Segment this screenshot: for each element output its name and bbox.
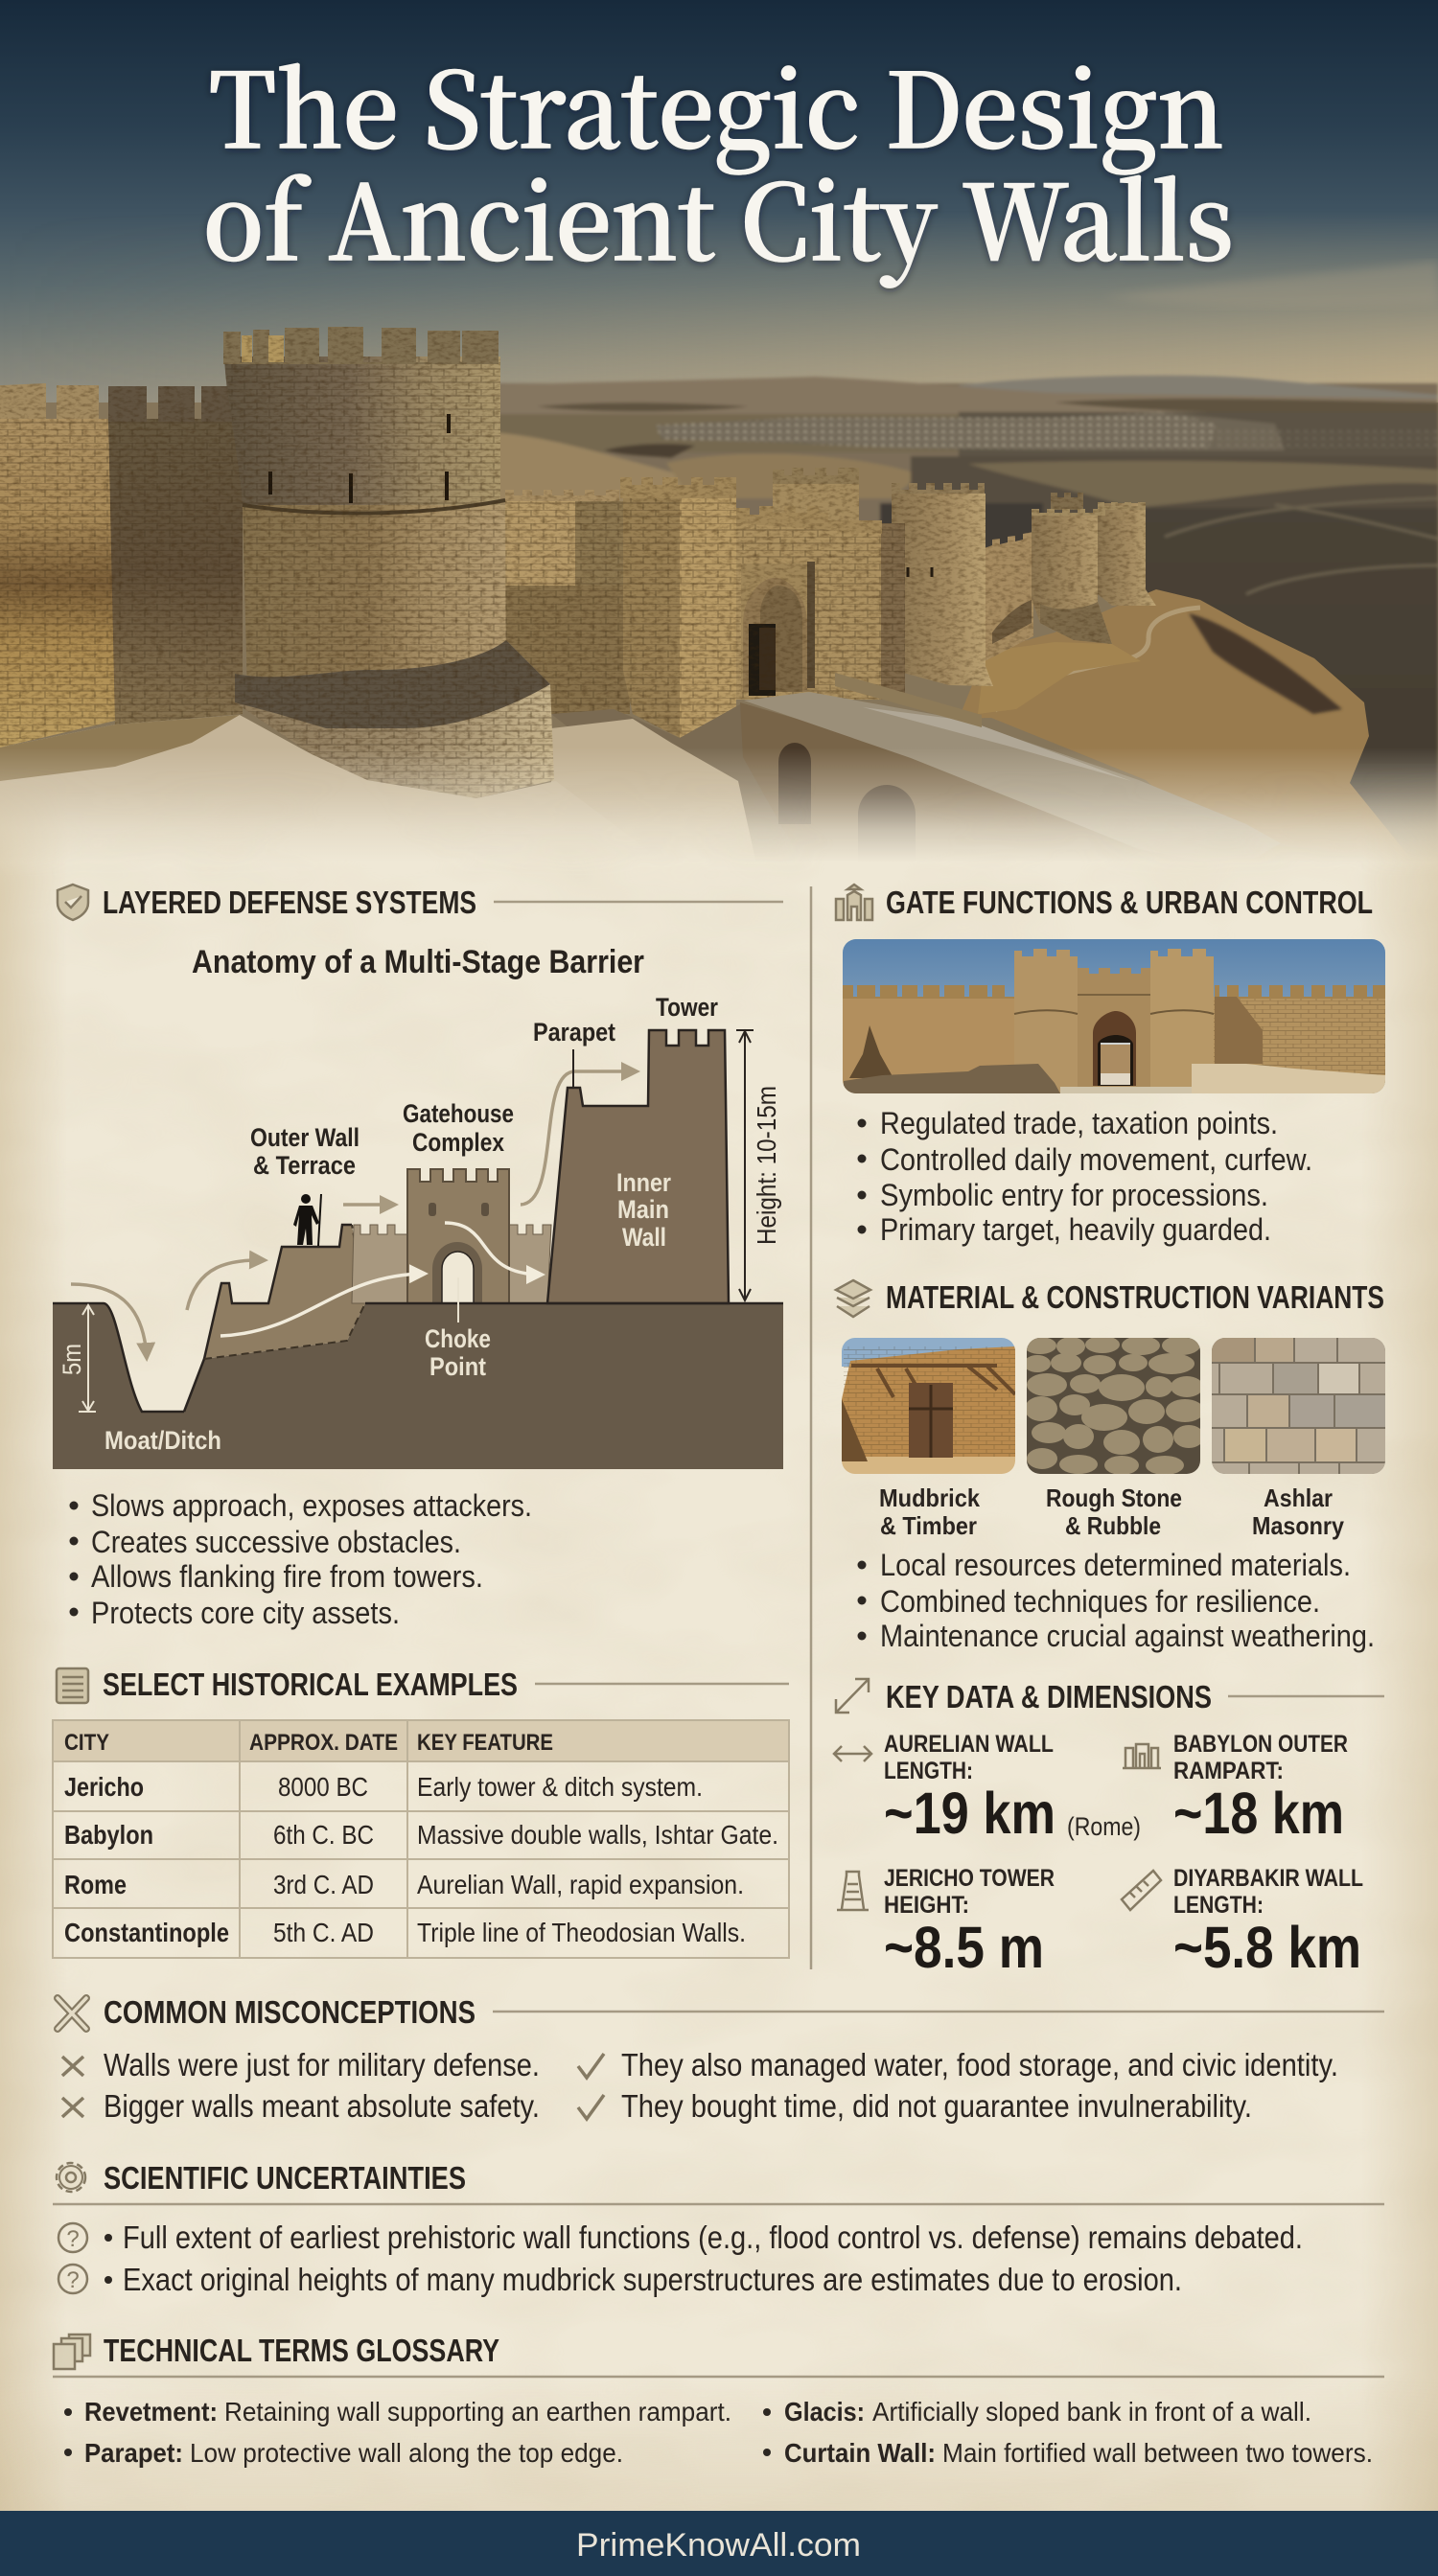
icon: gear xyxy=(57,2163,85,2192)
glossary terms: Revetment: xyxy=(84,2397,218,2426)
glossary terms: Main fortified wall between two towers. xyxy=(942,2438,1373,2468)
curtain wall right xyxy=(509,1225,551,1303)
captions: Mudbrick xyxy=(879,1484,980,1512)
heading: LAYERED DEFENSE SYSTEMS xyxy=(103,885,476,920)
arrow: path through terrace xyxy=(220,1274,425,1336)
icon: notepad xyxy=(57,1668,88,1703)
labels xyxy=(104,993,718,1455)
bullet list: Creates successive obstacles. xyxy=(91,1525,461,1559)
glossary terms: Curtain Wall: xyxy=(784,2438,936,2468)
panel: key data and dimensions xyxy=(834,1679,1384,1980)
icon: shield xyxy=(58,885,88,920)
title: of Ancient City Walls xyxy=(203,141,1234,289)
panel: scientific uncertainties xyxy=(53,2160,1384,2297)
curtain wall left xyxy=(352,1225,407,1303)
stat: Diyarbakir wall: ~5.8 km xyxy=(1173,1915,1361,1980)
panel: layered defense systems xyxy=(53,885,783,1630)
arrow: toward gatehouse xyxy=(343,1203,395,1207)
inner main wall and tower xyxy=(547,1030,729,1303)
heading: SELECT HISTORICAL EXAMPLES xyxy=(103,1667,518,1702)
dimension: 5m: 5m xyxy=(58,1344,86,1375)
table rows: Constantinople xyxy=(64,1918,229,1947)
table rows: 8000 BC xyxy=(278,1772,368,1802)
labels: Gatehouse xyxy=(403,1099,514,1128)
panel: technical terms glossary xyxy=(53,2333,1384,2468)
labels: & Terrace xyxy=(253,1151,356,1180)
uncertainty list: Full extent of earliest prehistoric wall functions (e.g., flood control vs. defense) remains debated. xyxy=(123,2220,1303,2255)
bullet list: Slows approach, exposes attackers. xyxy=(91,1488,532,1523)
table rows: Babylon xyxy=(64,1820,153,1850)
bullet list: Controlled daily movement, curfew. xyxy=(880,1142,1312,1177)
callout line xyxy=(457,1277,459,1322)
misconception list xyxy=(62,2047,540,2124)
bullet list xyxy=(69,1488,532,1630)
footer: PrimeKnowAll.com xyxy=(576,2527,861,2564)
bullet list: Symbolic entry for processions. xyxy=(880,1178,1268,1212)
icon: diagonal arrows xyxy=(836,1679,869,1713)
table header: CITY xyxy=(64,1730,109,1756)
heading: COMMON MISCONCEPTIONS xyxy=(104,1994,475,2030)
glossary terms: Artificially sloped bank in front of a wall. xyxy=(872,2397,1311,2426)
table rows: Rome xyxy=(64,1870,127,1899)
terrace xyxy=(204,1225,365,1359)
labels: Main xyxy=(617,1195,669,1224)
labels: Parapet xyxy=(533,1018,615,1046)
tower base xyxy=(235,640,554,798)
photo: rough stone xyxy=(1024,1336,1204,1475)
glossary terms: Retaining wall supporting an earthen rampart. xyxy=(224,2397,731,2426)
stat: Babylon rampart: ~18 km xyxy=(1173,1781,1344,1846)
bullet list: Regulated trade, taxation points. xyxy=(880,1106,1278,1140)
stat: Jericho tower xyxy=(837,1865,1055,1980)
stat: Aurelian wall: (Rome) xyxy=(1067,1812,1141,1841)
photo: mudbrick xyxy=(842,1338,1016,1474)
stat: Aurelian wall xyxy=(834,1731,1141,1846)
land base xyxy=(0,402,1438,862)
arrow: climb to terrace xyxy=(187,1260,265,1310)
stat: Diyarbakir wall: LENGTH: xyxy=(1173,1892,1264,1919)
labels: Outer Wall xyxy=(250,1123,360,1152)
labels: Complex xyxy=(412,1128,504,1157)
icon: layers xyxy=(836,1280,870,1317)
panel: gate functions and urban control xyxy=(836,885,1390,1247)
photo: ashlar xyxy=(1212,1338,1385,1474)
bullet list: Primary target, heavily guarded. xyxy=(880,1212,1271,1247)
panel: material and construction variants xyxy=(836,1279,1385,1653)
dimension: height: Height: 10-15m xyxy=(752,1086,781,1245)
uncertainty list xyxy=(58,2220,1303,2297)
glossary terms: Low protective wall along the top edge. xyxy=(190,2438,623,2468)
hero illustration: fortress above landscape xyxy=(0,0,1438,868)
labels: Wall xyxy=(622,1223,666,1252)
correction list: They also managed water, food storage, and civic identity. xyxy=(621,2047,1338,2082)
stat: Babylon rampart xyxy=(1123,1731,1348,1846)
panel: select historical examples xyxy=(53,1667,789,1958)
stat: Jericho tower: HEIGHT: xyxy=(884,1892,969,1919)
labels: Choke xyxy=(425,1324,491,1353)
soldier xyxy=(293,1194,321,1246)
stat: Babylon rampart: BABYLON OUTER xyxy=(1173,1731,1348,1758)
correction list: They bought time, did not guarantee invulnerability. xyxy=(621,2088,1252,2124)
captions: Masonry xyxy=(1252,1511,1344,1540)
bullet list xyxy=(857,1548,1375,1653)
icon: stacked pages xyxy=(54,2334,90,2369)
dimension: height xyxy=(736,1030,781,1300)
misconception list: Walls were just for military defense. xyxy=(104,2047,540,2082)
table rows: Triple line of Theodosian Walls. xyxy=(417,1918,746,1947)
heading: KEY DATA & DIMENSIONS xyxy=(886,1679,1212,1714)
dimension: 5m xyxy=(58,1305,96,1412)
bullet list: Combined techniques for resilience. xyxy=(880,1584,1320,1619)
table header: KEY FEATURE xyxy=(417,1730,553,1756)
table header xyxy=(64,1730,553,1756)
photo: city gate xyxy=(843,939,1390,1093)
diagram heading: Anatomy of a Multi-Stage Barrier xyxy=(192,944,644,980)
misconception list: Bigger walls meant absolute safety. xyxy=(104,2088,540,2124)
big round tower xyxy=(223,327,506,695)
uncertainty list: Exact original heights of many mudbrick superstructures are estimates due to erosion. xyxy=(123,2262,1182,2297)
glossary terms: Parapet: xyxy=(84,2438,183,2468)
captions: & Rubble xyxy=(1065,1511,1161,1540)
stat: Jericho tower: JERICHO TOWER xyxy=(884,1865,1055,1892)
labels: Inner xyxy=(616,1168,671,1197)
foreground ground xyxy=(0,715,671,868)
arrow: up to parapet xyxy=(521,1071,637,1205)
sky xyxy=(0,0,1438,422)
labels: Point xyxy=(429,1352,486,1381)
captions: Ashlar xyxy=(1264,1484,1333,1512)
bullet list: Local resources determined materials. xyxy=(880,1548,1351,1582)
stone bridge xyxy=(740,673,1264,840)
stat: Aurelian wall: LENGTH: xyxy=(884,1758,973,1784)
central gate complex xyxy=(505,468,905,738)
table header: APPROX. DATE xyxy=(249,1730,398,1756)
correction list xyxy=(578,2047,1338,2124)
ground xyxy=(53,1303,783,1469)
stat: Aurelian wall: AURELIAN WALL xyxy=(884,1731,1054,1758)
bullet list xyxy=(857,1106,1312,1247)
table rows: Aurelian Wall, rapid expansion. xyxy=(417,1870,744,1899)
heading: TECHNICAL TERMS GLOSSARY xyxy=(104,2333,499,2368)
stat: Diyarbakir wall xyxy=(1122,1865,1363,1980)
stat: Babylon rampart: RAMPART: xyxy=(1173,1758,1284,1784)
glossary terms: Glacis: xyxy=(784,2397,865,2426)
table rows: Early tower & ditch system. xyxy=(417,1772,703,1802)
captions xyxy=(879,1484,1344,1540)
table rows xyxy=(64,1772,778,1947)
icon: crossed tools xyxy=(58,1998,86,2029)
bullet list: Allows flanking fire from towers. xyxy=(91,1559,483,1594)
left curtain wall xyxy=(0,383,243,748)
stat: Diyarbakir wall: DIYARBAKIR WALL xyxy=(1173,1865,1363,1892)
captions: & Timber xyxy=(880,1511,977,1540)
table xyxy=(53,1720,789,1958)
panel: common misconceptions xyxy=(58,1994,1384,2124)
uncertainty list: ? xyxy=(66,2226,80,2252)
heading: SCIENTIFIC UNCERTAINTIES xyxy=(104,2160,466,2196)
distant landscape xyxy=(500,374,1438,828)
bullet list: Protects core city assets. xyxy=(91,1596,400,1630)
stat: Jericho tower: ~8.5 m xyxy=(884,1915,1044,1980)
table rows: 5th C. AD xyxy=(273,1918,374,1947)
under bridge shadow and rocks xyxy=(551,704,755,842)
table rows: 6th C. BC xyxy=(273,1820,374,1850)
table rows: 3rd C. AD xyxy=(273,1870,374,1899)
table rows: Jericho xyxy=(64,1772,144,1802)
uncertainty list: ? xyxy=(66,2267,80,2293)
cross-section diagram xyxy=(53,993,783,1469)
title: The Strategic Design xyxy=(209,29,1224,177)
bullet list: Maintenance crucial against weathering. xyxy=(880,1619,1375,1653)
far towers and walls xyxy=(892,483,1156,686)
bottom fade xyxy=(0,748,1438,862)
glossary terms xyxy=(64,2397,1373,2468)
icon: gate xyxy=(836,885,872,920)
arrow: approach into moat xyxy=(71,1284,147,1358)
hillside xyxy=(963,589,1392,838)
captions: Rough Stone xyxy=(1046,1484,1182,1512)
labels: Tower xyxy=(656,993,718,1022)
footer xyxy=(0,2511,1438,2576)
table rows: Massive double walls, Ishtar Gate. xyxy=(417,1820,778,1850)
gatehouse xyxy=(407,1169,509,1303)
labels: Moat/Ditch xyxy=(104,1426,221,1455)
arrow: through gate xyxy=(445,1223,542,1275)
stat: Aurelian wall: ~19 km xyxy=(884,1781,1055,1846)
title xyxy=(203,29,1234,289)
